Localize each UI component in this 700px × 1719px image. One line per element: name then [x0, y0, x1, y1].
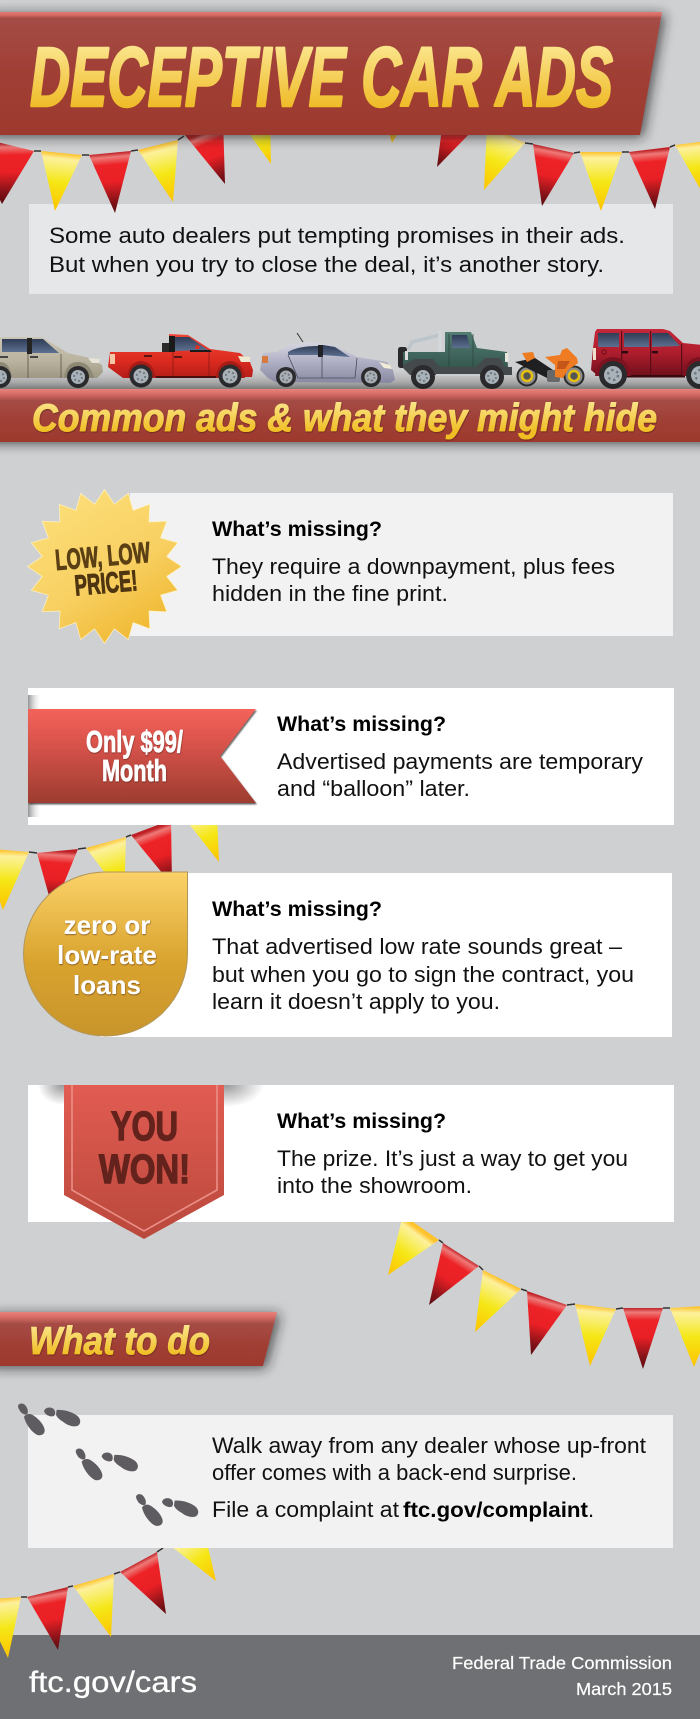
panel: low low price: What’s missing?	[212, 517, 382, 541]
footer bar	[0, 1635, 700, 1719]
medal badge: zero or low-rate loans: loans	[73, 970, 141, 1000]
panel: what to do: Walk away from any dealer whose up-front	[212, 1433, 646, 1458]
bunting flags above what to do	[388, 1215, 700, 1369]
panel: what to do: ftc.gov/complaint	[403, 1498, 588, 1522]
starburst badge: low low price	[28, 490, 182, 644]
vehicles row	[0, 329, 700, 389]
bunting flags above footer	[0, 1530, 216, 1658]
red pickup truck	[108, 334, 253, 388]
panel: zero or low-rate loans: What’s missing?	[212, 897, 382, 921]
panel: low low price	[130, 493, 673, 636]
medal badge: zero or low-rate loans: low-rate	[57, 940, 157, 970]
panel: what to do: offer comes with a back-end surprise.	[212, 1460, 577, 1485]
section heading: what to do: What to do	[29, 1320, 210, 1363]
top bunting flags	[0, 118, 700, 213]
pennant badge: you won	[64, 1085, 224, 1239]
footer bar: ftc.gov/cars	[29, 1666, 197, 1699]
starburst badge: low low price: LOW, LOW	[54, 537, 152, 577]
pennant badge: you won: WON!	[99, 1146, 190, 1192]
panel: only 99 per month	[28, 688, 674, 825]
panel: low low price: They require a downpayment, plus fees	[212, 554, 615, 579]
section ribbon: what to do	[0, 1312, 277, 1366]
ribbon badge: only 99 per month	[28, 709, 256, 803]
road shadow	[0, 370, 700, 389]
footprint pair 3	[136, 1494, 198, 1526]
title banner	[0, 12, 662, 135]
panel: what to do: File a complaint at	[212, 1497, 399, 1522]
intro text panel: But when you try to close the deal, it’s another story.	[49, 252, 604, 277]
footprint pair 1	[18, 1404, 80, 1435]
footer bar: March 2015	[576, 1679, 672, 1699]
panel: only 99 per month: Advertised payments are temporary	[277, 749, 643, 774]
bunting flags above zero-rate panel	[0, 815, 219, 910]
intro text panel	[29, 204, 673, 294]
medal badge: zero or low-rate loans	[23, 872, 187, 1036]
section heading: common ads: Common ads & what they might hide	[32, 397, 657, 440]
panel: you won	[28, 1085, 674, 1222]
pennant badge: you won: YOU	[111, 1103, 178, 1149]
panel: you won: The prize. It’s just a way to get you	[277, 1146, 628, 1171]
orange motorcycle	[515, 348, 584, 386]
panel: what to do: .	[588, 1497, 594, 1522]
panel: zero or low-rate loans	[100, 873, 672, 1037]
intro text panel: Some auto dealers put tempting promises in their ads.	[49, 223, 625, 248]
green jeep	[398, 331, 512, 389]
footprint pair 2	[76, 1449, 138, 1480]
ribbon badge: only 99 per month: Only $99/	[86, 724, 183, 759]
ribbon badge: only 99 per month: Month	[102, 753, 167, 788]
panel: zero or low-rate loans: That advertised low rate sounds great –	[212, 934, 623, 959]
panel: only 99 per month: and “balloon” later.	[277, 776, 470, 801]
icon: footprints	[18, 1404, 198, 1526]
panel: only 99 per month: What’s missing?	[277, 712, 446, 736]
footer bar: Federal Trade Commission	[452, 1653, 672, 1673]
panel: low low price: hidden in the fine print.	[212, 581, 448, 606]
panel: zero or low-rate loans: learn it doesn’t apply to you.	[212, 989, 500, 1014]
beige SUV	[0, 337, 103, 388]
silver sedan	[260, 333, 395, 387]
medal badge: zero or low-rate loans: zero or	[64, 910, 150, 940]
red SUV	[591, 329, 700, 389]
starburst badge: low low price: PRICE!	[73, 565, 139, 603]
panel: zero or low-rate loans: but when you go to sign the contract, you	[212, 962, 634, 987]
panel: you won: into the showroom.	[277, 1173, 472, 1198]
panel: you won: What’s missing?	[277, 1109, 446, 1133]
panel: what to do	[28, 1415, 673, 1548]
section ribbon: common ads	[0, 389, 700, 442]
